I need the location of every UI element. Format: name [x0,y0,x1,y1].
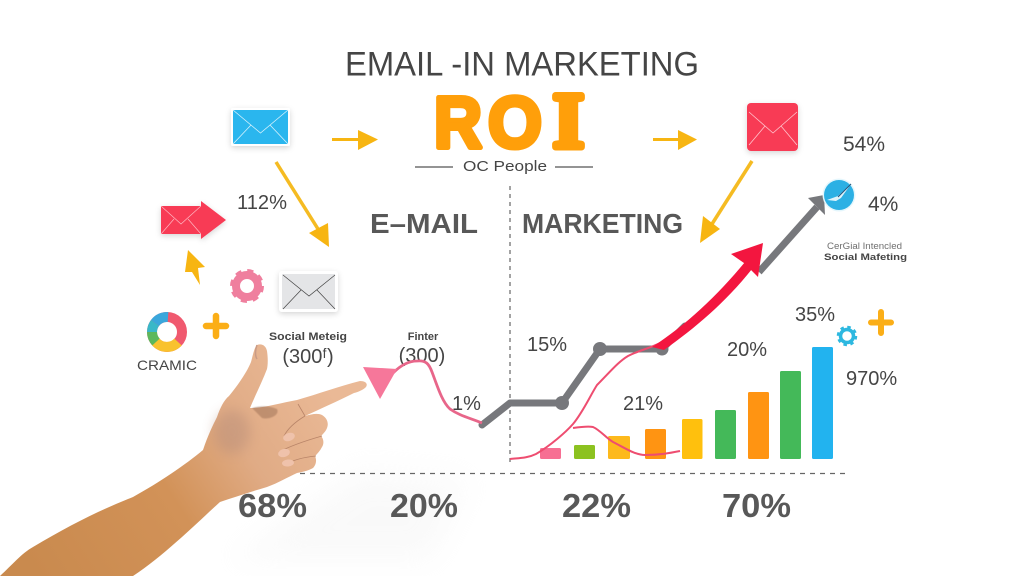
arrow: top right horizontal [653,130,697,150]
icon: blue envelope [231,108,290,146]
thumb nail [256,345,257,359]
caption: social marketing: CerGial Intencled [827,241,902,251]
arrow: small yellow [185,250,205,285]
bar chart [540,347,833,459]
heading: ROI: R [434,84,482,164]
red arrow [652,243,763,350]
label: social marketing: Social Meteig [269,331,347,343]
percentage: bottom 68: 68% [238,487,307,524]
pink line from triangle [393,361,482,423]
label: social marketing [269,331,347,368]
icon: pink gear [232,271,262,301]
pink wavy line [573,427,680,455]
pink thin trend line [510,343,660,459]
grey trend line [482,326,685,425]
icon: red envelope top right [747,103,798,151]
subtitle: OC People [463,158,547,175]
icon: orange plus [206,316,226,336]
icon: donut logo [152,317,182,347]
label: finter: (300) [399,345,445,367]
icon: blue gear [838,327,856,345]
thumb web crease [252,406,278,418]
title: EMAIL -IN MARKETING [345,46,699,84]
label: CRAMIC: CRAMIC [137,357,197,373]
percentage: 35: 35% [795,304,835,326]
percentage: bottom 22: 22% [562,487,631,524]
hand pointing [0,344,367,576]
percentage: bottom 20: 20% [390,487,458,524]
icon: orange plus right [871,312,891,333]
heading: ROI [434,77,584,164]
arrow: top left horizontal [332,130,378,150]
icon: red envelope with arrow [161,201,226,239]
percentage: 54: 54% [843,133,885,156]
percentage: 112: 112% [237,192,287,214]
caption: social marketing [824,241,907,263]
percentage: 1: 1% [452,393,481,415]
icon: grey envelope [279,271,338,312]
heading: ROI: O [488,84,542,164]
heading: MARKETING: MARKETING [522,208,683,239]
heading: ROI: I [553,77,584,164]
arrow: diagonal to marketing [700,161,752,243]
grey arrow to blue circle [759,195,825,272]
icon: blue compass circle [822,178,856,212]
pink triangle [363,367,397,399]
center dashed divider [509,186,511,462]
heading: E-MAIL: E–MAIL [370,208,478,239]
label: finter [399,331,445,367]
arrow: diagonal to grey envelope [276,162,329,247]
percentage: 4: 4% [868,193,898,216]
percentage: 20: 20% [727,339,767,361]
baseline dashed axis [300,472,846,474]
caption: social marketing: Social Mafeting [824,252,907,263]
percentage: bottom 70: 70% [722,487,791,524]
finger nails [277,431,296,467]
curled finger creases [279,404,322,465]
label: social marketing: (300ᶠ) [282,346,334,368]
percentage: 21: 21% [623,393,663,415]
percentage: 15: 15% [527,334,567,356]
palm shading [214,410,250,454]
label: finter: Finter [408,331,439,343]
percentage: 970: 970% [846,368,897,390]
